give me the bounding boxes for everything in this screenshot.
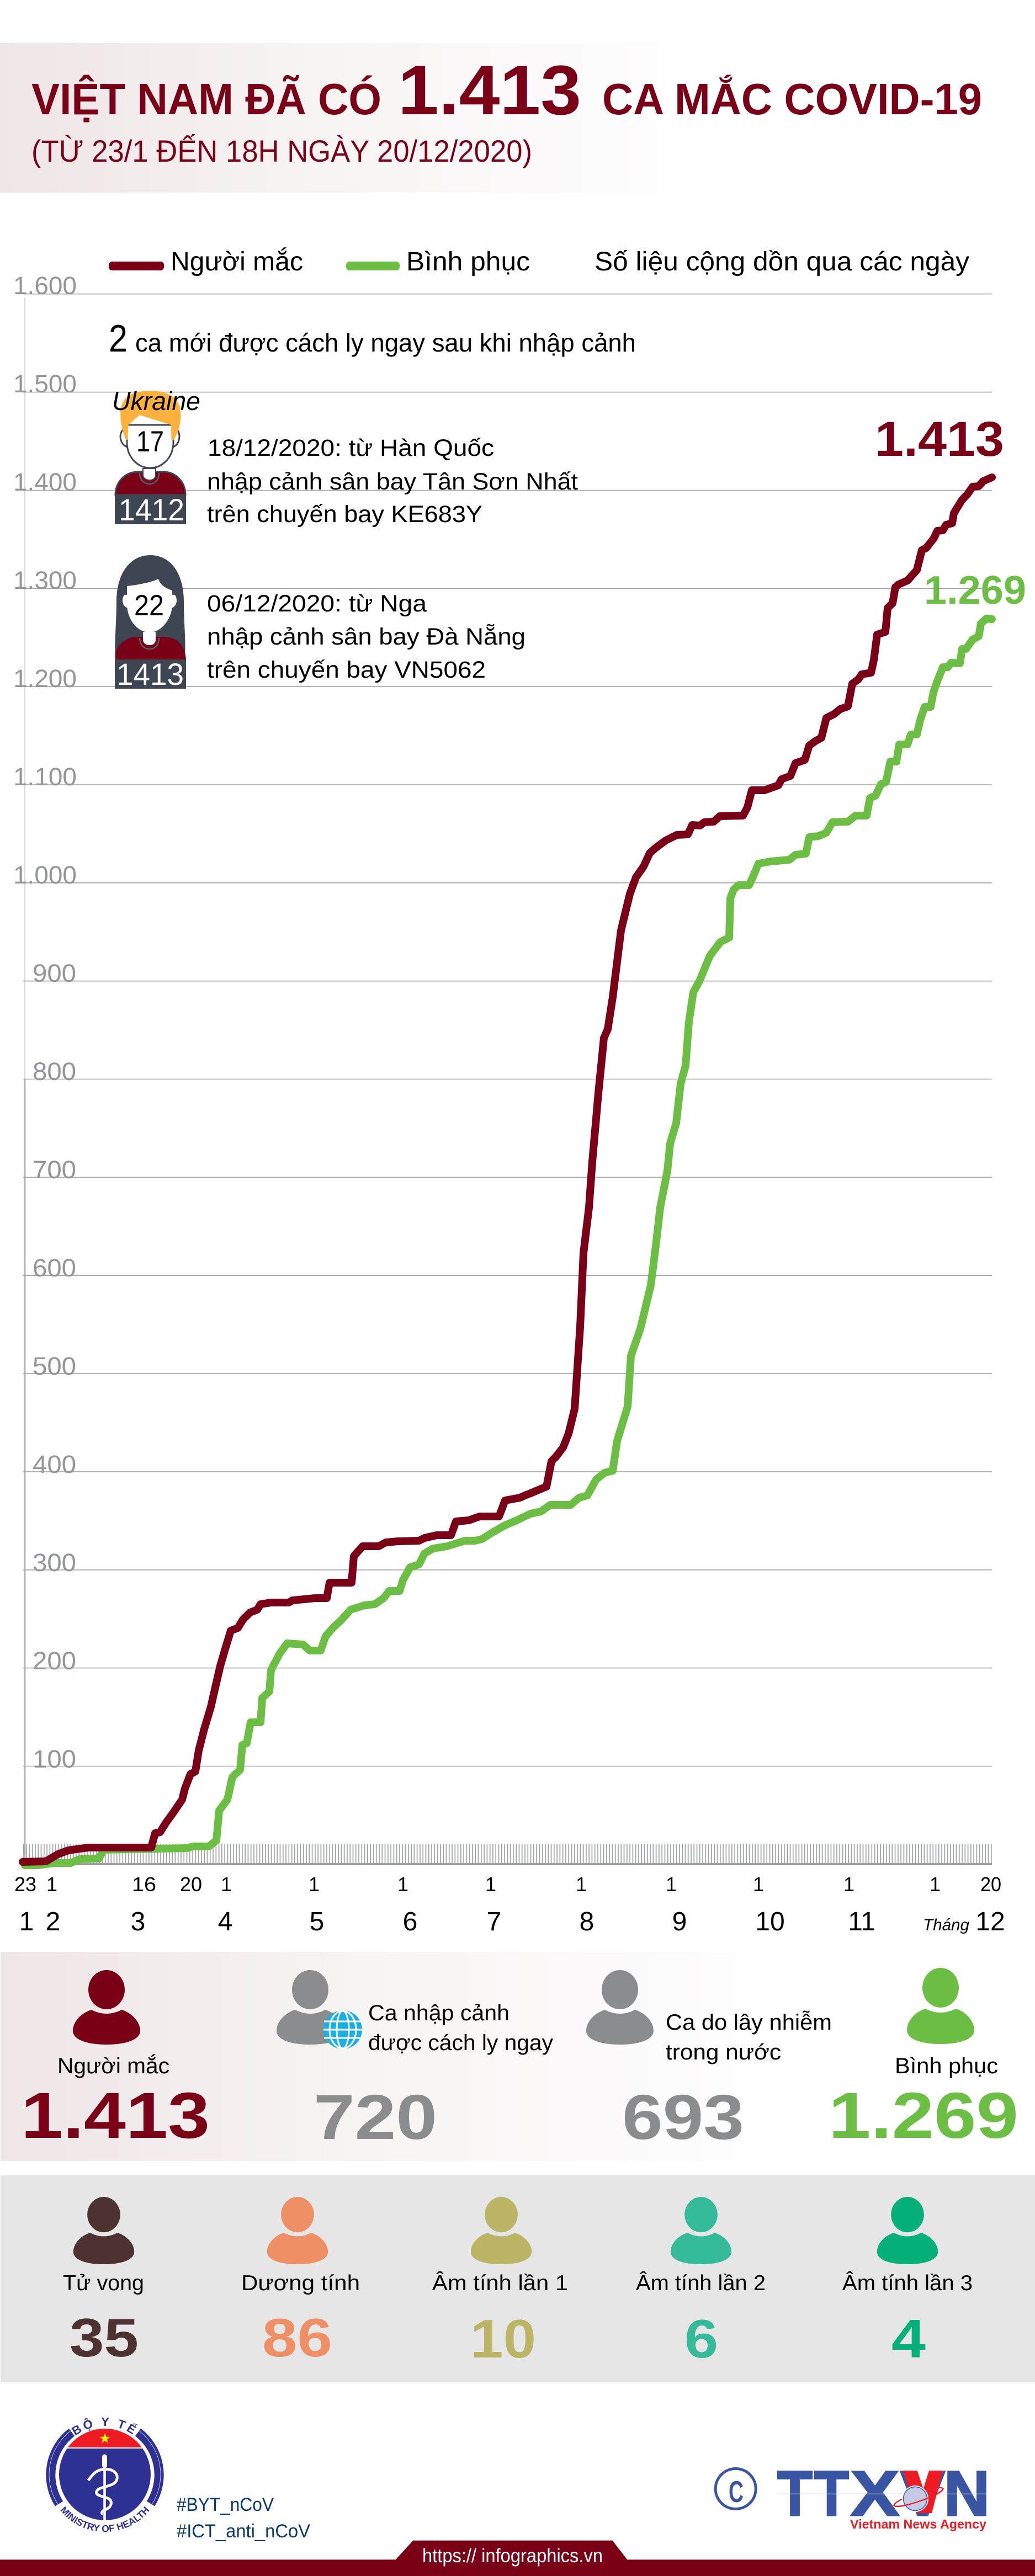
value: cases: 1.413	[21, 2079, 210, 2152]
icon: patient 1413: 22	[134, 589, 164, 622]
logo: ministry of health	[46, 2417, 164, 2532]
x axis day labels: 1	[46, 1873, 57, 1896]
callout heading	[109, 317, 636, 360]
x axis month labels: 4	[218, 1907, 232, 1936]
icon: patient 1412	[115, 391, 186, 527]
x axis month labels: 6	[403, 1907, 417, 1936]
x axis month labels: 8	[580, 1907, 594, 1936]
footer bar	[0, 2540, 1035, 2576]
x axis day labels: 23	[14, 1873, 36, 1896]
x axis day labels: 16	[132, 1873, 156, 1896]
x axis month labels: 7	[487, 1907, 501, 1936]
patient 1412 details: trên chuyến bay KE683Y	[207, 501, 482, 528]
status: negative once: 10	[470, 2308, 536, 2369]
y axis labels: 1.300	[13, 566, 77, 594]
x axis month labels: 1	[19, 1907, 34, 1936]
agency wordmark: T	[777, 2458, 813, 2529]
label: imported: được cách ly ngay	[368, 2031, 553, 2055]
y axis labels: 200	[33, 1647, 76, 1675]
legend: Số liệu cộng dồn qua các ngày	[595, 247, 969, 276]
title: VIỆT NAM ĐÃ CÓ	[31, 74, 381, 124]
patient 1412 details: nhập cảnh sân bay Tân Sơn Nhất	[207, 469, 578, 495]
title: 1.413	[398, 51, 581, 129]
patient 1413 details: nhập cảnh sân bay Đà Nẵng	[207, 624, 526, 650]
icon: person recovered	[907, 1968, 974, 2044]
new cases callout	[109, 317, 636, 691]
title	[31, 51, 982, 129]
label: domestic	[666, 2010, 832, 2064]
status: deaths: Tử vong	[63, 2271, 144, 2295]
y axis labels: 700	[33, 1156, 76, 1184]
agency wordmark: N	[944, 2458, 990, 2529]
y axis labels: 100	[33, 1745, 76, 1773]
patient 1412 details: 18/12/2020: từ Hàn Quốc	[208, 435, 494, 461]
logo: copyright ttxvn	[715, 2458, 990, 2531]
x axis day labels: 20	[980, 1873, 1001, 1896]
recovered line	[25, 619, 992, 1865]
y axis labels: 1.100	[13, 763, 77, 791]
status: deaths: 35	[70, 2307, 139, 2368]
x axis day labels: 1	[666, 1873, 677, 1896]
x axis day labels: 1	[397, 1873, 408, 1896]
x axis day labels: 20	[180, 1873, 202, 1896]
icon: patient 1412: 1412	[119, 492, 184, 527]
icon: patient 1413: 1413	[116, 657, 184, 691]
y axis labels: 1.000	[13, 861, 77, 889]
status: positive: 86	[262, 2307, 332, 2368]
x axis day labels: 1	[753, 1873, 764, 1896]
x axis day labels: 1	[221, 1873, 232, 1896]
icon: copyright	[715, 2469, 756, 2509]
patient 1413 details: trên chuyến bay VN5062	[207, 657, 486, 683]
status: deaths	[63, 2197, 144, 2368]
icon: patient 1412: 17	[136, 425, 164, 458]
callout heading: 2	[109, 317, 128, 360]
label: recovered: Bình phục	[895, 2054, 998, 2078]
x axis month labels: 12	[975, 1907, 1005, 1936]
x axis month labels	[19, 1907, 1005, 1936]
x axis day labels: 1	[309, 1873, 320, 1896]
label: domestic: Ca do lây nhiễm	[666, 2010, 832, 2035]
status: negative three times	[842, 2197, 973, 2369]
x axis month labels: 2	[46, 1907, 60, 1936]
subtitle: (TỪ 23/1 ĐẾN 18H NGÀY 20/12/2020)	[31, 134, 532, 168]
label: imported: Ca nhập cảnh	[368, 2001, 509, 2025]
x axis month labels: 9	[672, 1907, 687, 1936]
title band	[0, 43, 982, 193]
y axis labels: 1.500	[13, 370, 77, 398]
status: negative twice	[636, 2197, 766, 2369]
agency name: Vietnam News Agency	[850, 2517, 986, 2531]
label: cases: Người mắc	[57, 2053, 169, 2078]
status: negative once: Âm tính lần 1	[432, 2271, 568, 2295]
status: negative twice: 6	[684, 2308, 718, 2369]
y axis labels: 1.200	[13, 664, 77, 693]
status: positive	[241, 2197, 360, 2368]
x axis month labels: 3	[131, 1907, 145, 1936]
agency wordmark: T	[814, 2458, 849, 2529]
x axis day labels: 1	[485, 1873, 496, 1896]
cases line	[23, 477, 992, 1862]
x axis day labels	[14, 1873, 1001, 1896]
legend	[109, 247, 969, 276]
icon: person imported	[277, 1970, 344, 2045]
cases end label: 1.413	[875, 411, 1004, 466]
logo: ministry of health: MINISTRY OF HEALTH	[60, 2506, 150, 2532]
y axis labels: 600	[33, 1254, 76, 1282]
hashtags: #ICT_anti_nCoV	[177, 2521, 310, 2542]
patient 1412 details	[207, 435, 578, 528]
legend: Người mắc	[171, 247, 303, 276]
recovered end label: 1.269	[924, 568, 1026, 613]
y axis labels: 900	[33, 959, 76, 987]
x axis month labels: 11	[848, 1907, 875, 1936]
nationality label: Ukraine	[112, 386, 200, 416]
status: negative three times: Âm tính lần 3	[842, 2271, 973, 2295]
y axis labels: 500	[33, 1352, 76, 1380]
icon: copyright: C	[729, 2474, 744, 2509]
title: CA MẮC COVID-19	[602, 74, 982, 124]
x axis day labels: 1	[576, 1873, 587, 1896]
y axis labels	[13, 272, 77, 1773]
status: negative once	[432, 2197, 568, 2369]
icon: patient 1413	[115, 555, 186, 691]
label: domestic: trong nước	[666, 2040, 781, 2064]
patient 1413 details	[207, 590, 526, 683]
x axis month labels: 5	[310, 1907, 324, 1936]
month axis caption: Tháng	[923, 1916, 969, 1934]
agency wordmark	[777, 2458, 990, 2529]
y axis labels: 800	[33, 1057, 76, 1085]
agency wordmark: X	[851, 2458, 899, 2529]
icon: person cases	[73, 1970, 140, 2045]
logo: ministry of health: BỘ Y TẾ	[72, 2417, 138, 2435]
icon: globe	[323, 2010, 362, 2049]
chart axes and grid	[23, 294, 992, 1864]
patient 1413 details: 06/12/2020: từ Nga	[207, 590, 427, 617]
panel: patient status	[1, 2175, 1035, 2382]
value: domestic: 693	[622, 2082, 744, 2153]
y axis labels: 1.400	[13, 468, 77, 496]
value: imported: 720	[314, 2082, 437, 2153]
label: imported	[368, 2001, 553, 2055]
status: negative three times: 4	[891, 2308, 926, 2369]
x axis month labels: 10	[755, 1907, 785, 1936]
callout heading: ca mới được cách ly ngay sau khi nhập cảnh	[135, 328, 636, 357]
panel: totals	[1, 1952, 1018, 2161]
hashtags: #BYT_nCoV	[177, 2494, 274, 2515]
value: recovered: 1.269	[829, 2079, 1018, 2152]
y axis labels: 300	[33, 1548, 76, 1577]
hashtags	[177, 2494, 310, 2542]
legend: Bình phục	[406, 247, 530, 276]
icon: person domestic	[586, 1970, 654, 2045]
x axis day labels: 1	[843, 1873, 854, 1896]
line chart	[13, 272, 1026, 1936]
status: positive: Dương tính	[241, 2271, 360, 2295]
status: negative twice: Âm tính lần 2	[636, 2271, 766, 2295]
agency wordmark: V	[900, 2458, 945, 2529]
x axis day labels: 1	[930, 1873, 941, 1896]
source url: https:// infographics.vn	[422, 2545, 603, 2567]
y axis labels: 400	[33, 1450, 76, 1478]
y axis labels: 1.600	[13, 272, 77, 300]
